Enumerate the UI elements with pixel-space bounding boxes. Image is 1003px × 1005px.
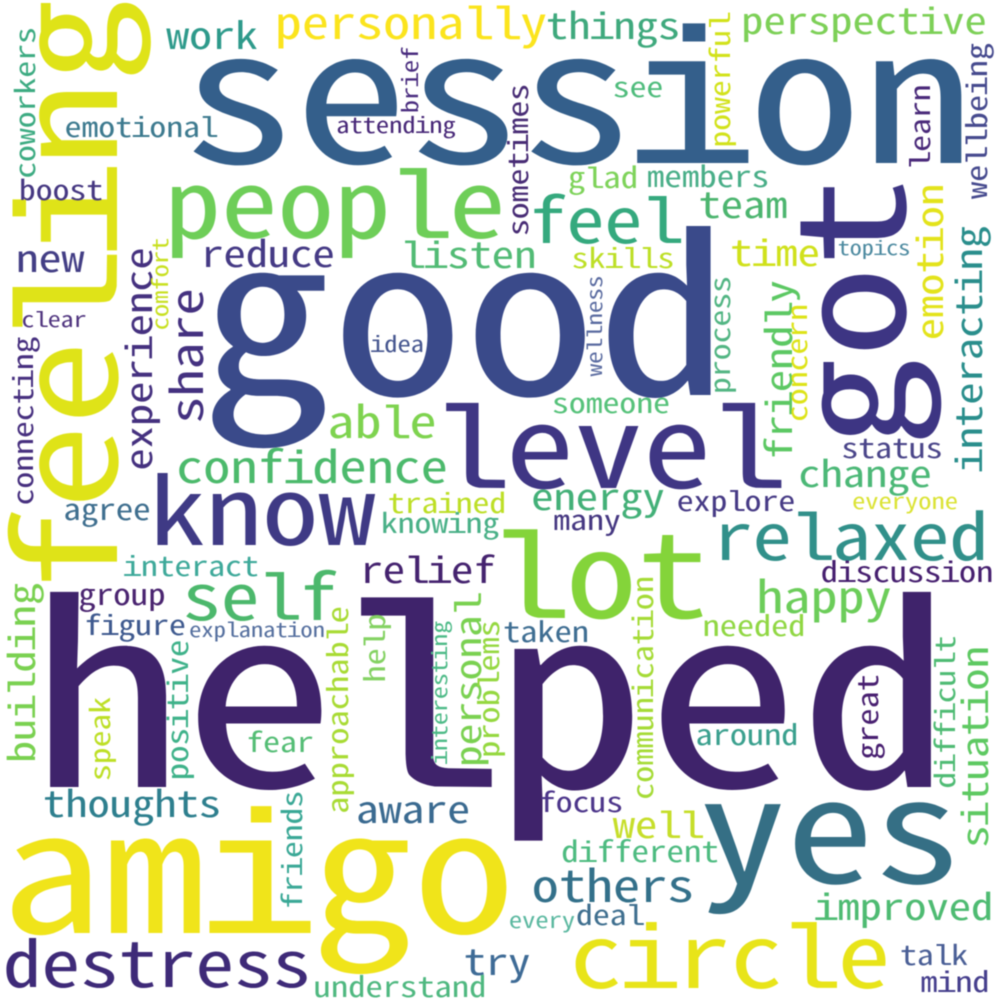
word: interesting: interesting: [422, 621, 454, 766]
word: wellbeing: wellbeing: [954, 43, 996, 199]
word: comfort: comfort: [144, 238, 175, 330]
word: trained: trained: [388, 480, 506, 522]
word: discussion: discussion: [821, 549, 993, 591]
word: personal: personal: [440, 593, 493, 767]
word: good: good: [199, 141, 729, 459]
word: mind: mind: [920, 959, 990, 1001]
word: figure: figure: [84, 602, 186, 644]
word: helped: helped: [30, 492, 952, 866]
word: group: group: [78, 572, 166, 614]
word: difficult: difficult: [922, 635, 964, 789]
word: powerful: powerful: [697, 12, 739, 148]
word: help: help: [352, 613, 394, 683]
word: relaxed: relaxed: [713, 485, 989, 581]
word: destress: destress: [3, 914, 311, 1005]
word: relief: relief: [361, 541, 495, 595]
word: energy: energy: [531, 468, 665, 521]
word: try: try: [464, 933, 530, 986]
word: new: new: [16, 229, 84, 284]
word: wellness: wellness: [578, 276, 609, 376]
word: deal: deal: [576, 892, 644, 934]
word: time: time: [730, 224, 820, 278]
word: taken: taken: [503, 609, 589, 651]
word: yes: yes: [699, 716, 961, 925]
word: glad: glad: [568, 155, 638, 197]
word: interacting: interacting: [940, 226, 994, 475]
word: status: status: [841, 425, 943, 466]
word: problems: problems: [466, 620, 508, 758]
word: coworkers: coworkers: [2, 27, 43, 179]
word: see: see: [613, 64, 663, 105]
word: thoughts: thoughts: [43, 775, 221, 828]
word: great: great: [845, 674, 887, 760]
word: reduce: reduce: [201, 225, 335, 278]
word: friends: friends: [269, 791, 311, 909]
word: sometimes: sometimes: [495, 84, 537, 236]
word: many: many: [553, 497, 621, 538]
word: learn: learn: [897, 84, 939, 171]
word: fear: fear: [246, 719, 314, 760]
word: explore: explore: [677, 478, 795, 520]
word: idea: idea: [369, 328, 424, 359]
word: brief: brief: [394, 47, 425, 113]
word: approachable: approachable: [315, 606, 357, 814]
word: feel: feel: [529, 171, 682, 263]
word: process: process: [697, 276, 738, 394]
word: focus: focus: [539, 779, 623, 820]
word: well: well: [613, 796, 703, 850]
word: situation: situation: [946, 646, 1000, 848]
word: communication: communication: [620, 576, 662, 800]
word: people: people: [164, 129, 506, 268]
word: share: share: [151, 288, 217, 424]
word: topics: topics: [838, 232, 910, 261]
word: know: know: [149, 436, 375, 572]
word: needed: needed: [703, 603, 805, 645]
word: different: different: [561, 829, 719, 871]
word: confidence: confidence: [176, 431, 448, 497]
word: knowing: knowing: [381, 500, 499, 542]
word: talk: talk: [900, 932, 968, 974]
word: skills: skills: [572, 235, 674, 277]
word: others: others: [532, 850, 694, 916]
word: got: got: [731, 177, 948, 447]
word: lot: lot: [484, 480, 709, 655]
word: clear: clear: [21, 302, 87, 334]
word: level: level: [428, 357, 782, 524]
word: boost: boost: [19, 167, 103, 208]
word: emotional: emotional: [65, 104, 218, 146]
word: improved: improved: [812, 878, 993, 932]
word: happy: happy: [756, 561, 892, 627]
word: positive: positive: [155, 640, 197, 780]
word: around: around: [696, 712, 798, 754]
word: amigo: amigo: [1, 737, 515, 986]
word: listen: listen: [399, 226, 536, 280]
word: work: work: [166, 6, 258, 61]
word: friendly: friendly: [750, 280, 804, 460]
word: every: every: [509, 904, 575, 935]
word: self: self: [182, 547, 338, 640]
word: members: members: [647, 154, 769, 196]
word: attending: attending: [336, 109, 456, 140]
word: experience: experience: [110, 247, 164, 471]
word: connecting: connecting: [0, 337, 42, 505]
word: everyone: everyone: [852, 485, 958, 516]
word: agree: agree: [63, 487, 151, 529]
word: someone: someone: [552, 380, 670, 421]
word: explanation: explanation: [189, 614, 325, 643]
word: understand: understand: [314, 964, 486, 1005]
word: able: able: [327, 386, 437, 452]
word: aware: aware: [356, 780, 470, 835]
word: emotion: emotion: [901, 184, 955, 340]
word: change: change: [798, 445, 932, 498]
word: speak: speak: [77, 697, 118, 781]
word: team: team: [698, 176, 788, 229]
word: concern: concern: [774, 304, 815, 422]
word: interact: interact: [122, 543, 259, 585]
